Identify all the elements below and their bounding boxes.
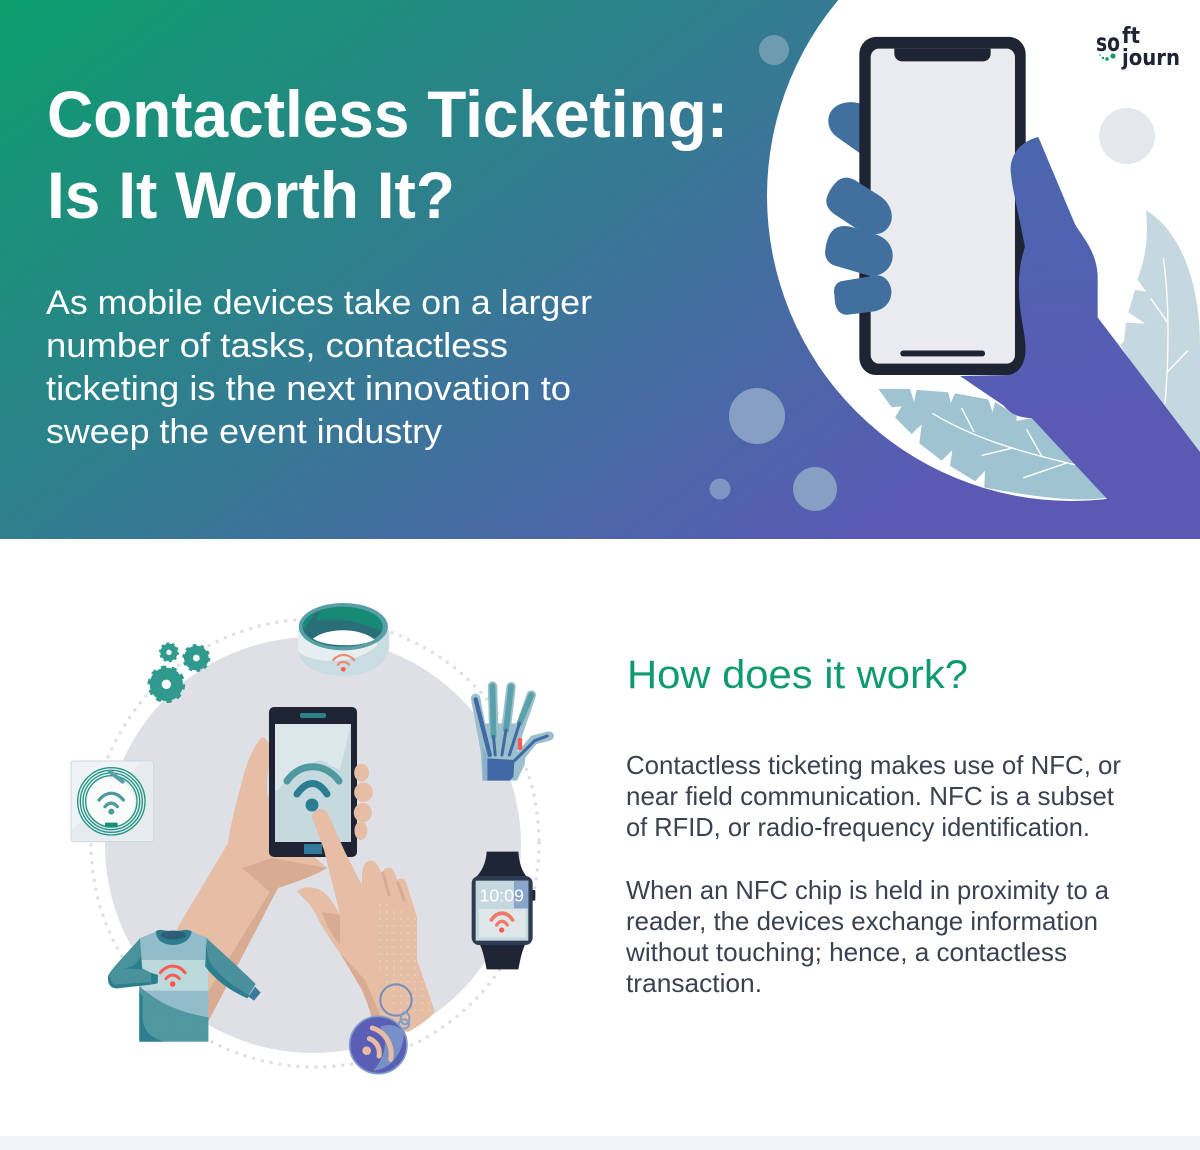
logo: ft: [1122, 24, 1140, 49]
logo: journ: [1121, 46, 1180, 71]
body text: first paragraph: of RFID, or radio-frequency identification.: [626, 812, 1090, 842]
body text: first paragraph: Contactless ticketing makes use of NFC, or: [626, 750, 1121, 780]
intro paragraph: As mobile devices take on a larger: [46, 284, 592, 322]
smartphone: [859, 37, 1026, 375]
icon: smartwatch: 10:09: [479, 885, 524, 905]
icon: gears: [150, 644, 209, 701]
body text: second paragraph: When an NFC chip is held in proximity to a: [626, 875, 1110, 905]
logo: so: [1096, 28, 1120, 57]
intro paragraph: ticketing is the next innovation to: [46, 370, 571, 408]
icon: x-ray hand with implant: [476, 686, 549, 781]
body text: second paragraph: reader, the devices exchange information: [626, 906, 1098, 936]
body text: first paragraph: [626, 750, 1121, 842]
heading: how does it work: How does it work?: [627, 653, 968, 697]
icon: NFC ring: [298, 603, 389, 676]
intro paragraph: number of tasks, contactless: [46, 327, 508, 365]
illustration: hand holding smartphone: [825, 37, 1200, 542]
back finger: [828, 102, 862, 155]
smartphone with wifi: [269, 707, 357, 857]
fingers: [825, 178, 893, 315]
pointing hand: [297, 809, 435, 1032]
icon: NFC sweater: [108, 930, 261, 1042]
bottom leaf: [878, 389, 1107, 499]
intro paragraph: sweep the event industry: [46, 413, 442, 451]
logo: [1096, 24, 1180, 71]
right leaf: [1120, 210, 1200, 455]
body text: second paragraph: [625, 875, 1110, 998]
icon: NFC tag: [71, 761, 154, 842]
body text: second paragraph: transaction.: [626, 968, 762, 998]
illustration: NFC devices circle: [71, 603, 549, 1074]
hand fingers behind phone: [354, 764, 373, 840]
header banner: [0, 0, 1200, 539]
title: Contactless Ticketing:: [47, 77, 728, 151]
body text: second paragraph: without touching; hence, a contactless: [625, 937, 1067, 967]
arm and holding hand: [160, 737, 327, 1022]
white circle backdrop: [767, 0, 1200, 501]
icon: NFC key fob: [350, 984, 412, 1074]
footer strip: [0, 1136, 1200, 1150]
dotted orbit: [91, 619, 539, 1067]
icon: smartwatch: [472, 852, 535, 969]
holding hand and thumb: [960, 137, 1200, 542]
title: Is It Worth It?: [47, 158, 455, 232]
gradient background: [0, 0, 1200, 539]
title: [47, 77, 728, 232]
intro paragraph: [46, 284, 592, 451]
decorative bubbles: [710, 35, 1155, 511]
grey circle: [105, 637, 521, 1053]
body text: first paragraph: near field communication. NFC is a subset: [626, 781, 1115, 811]
